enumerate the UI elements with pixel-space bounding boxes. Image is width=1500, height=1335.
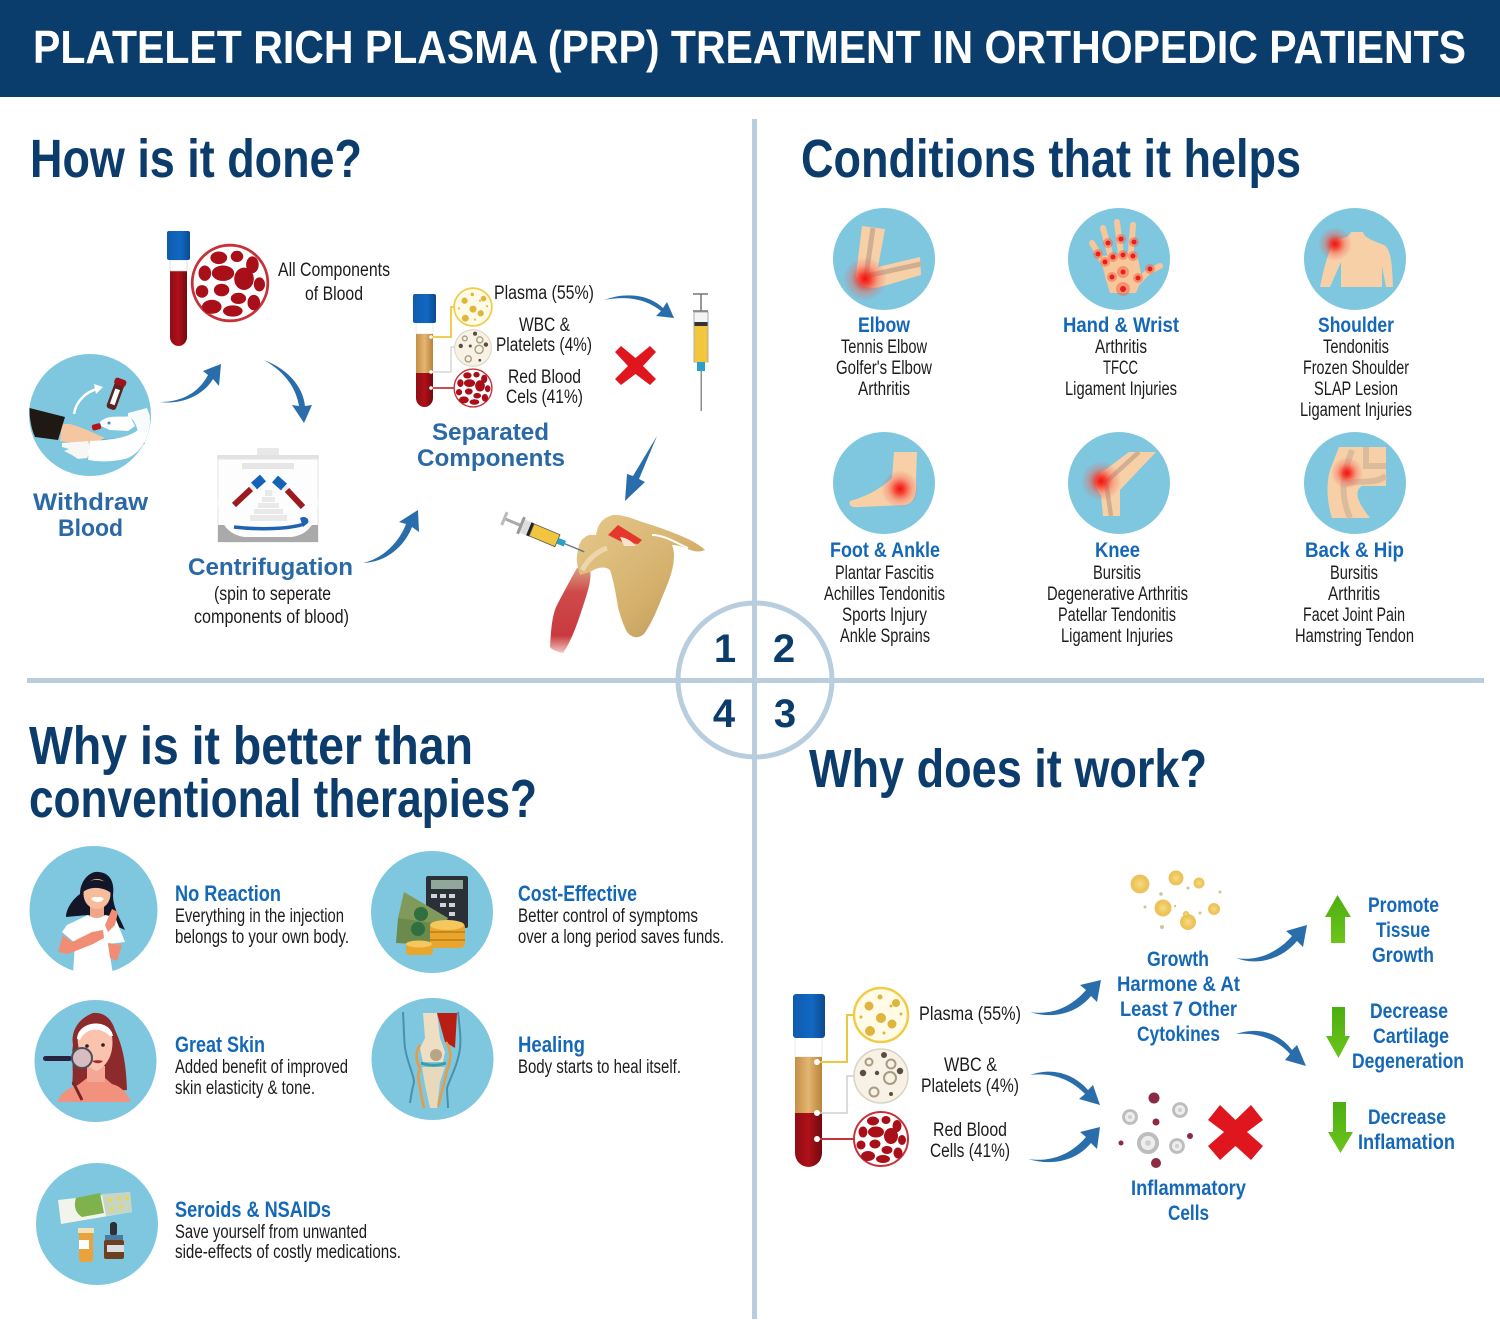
condition: hand and wrist: Hand & Wrist [1063, 314, 1179, 337]
illustration: shoulder injection [500, 510, 705, 653]
condition: shoulder: Tendonitis [1323, 337, 1389, 358]
outcome: decrease cartilage degeneration: Degeneration [1352, 1050, 1464, 1073]
condition: knee [1047, 432, 1188, 647]
label: centrifugation: Centrifugation [188, 554, 353, 581]
condition: foot and ankle: Sports Injury [842, 605, 927, 626]
labels: blood fractions: Cells (41%) [930, 1141, 1010, 1162]
benefit: healing: Healing [518, 1032, 585, 1057]
icon: growth factors [1130, 870, 1222, 930]
condition: back and hip: Hamstring Tendon [1295, 626, 1414, 647]
heading: how is it done: How is it done? [30, 129, 362, 189]
quadrant dividers and number circle: 4 [713, 692, 736, 736]
labels: blood fractions [494, 283, 594, 408]
icon: green down arrow [1326, 1007, 1350, 1058]
icon: blood tube [167, 231, 190, 346]
benefit: steroids and NSAIDs: Seroids & NSAIDs [175, 1197, 331, 1222]
condition: hand and wrist: Ligament Injuries [1065, 379, 1177, 400]
condition: elbow: Golfer's Elbow [836, 358, 932, 379]
icon: syringe [693, 294, 708, 411]
benefit: cost effective [371, 851, 724, 973]
label: separated components: Separated [432, 419, 549, 446]
condition: hand and wrist [1063, 208, 1179, 400]
outcome: decrease cartilage degeneration: Decrease [1370, 1000, 1448, 1023]
labels: blood fractions: Platelets (4%) [921, 1076, 1019, 1097]
benefit: healing: Body starts to heal itself. [518, 1057, 681, 1078]
arrow: withdraw to tube [160, 364, 221, 402]
heading: why does it work: Why does it work? [809, 739, 1207, 799]
outcome: decrease cartilage degeneration: Cartilage [1373, 1025, 1449, 1048]
labels: blood fractions: WBC & [519, 315, 570, 336]
condition: back and hip: Facet Joint Pain [1303, 605, 1405, 626]
benefit: great skin: Great Skin [175, 1032, 265, 1057]
icon: red cross [1208, 1105, 1263, 1160]
arrow: syringe to shoulder [625, 436, 657, 501]
benefit: no reaction [30, 846, 349, 974]
arrow: centrifuge to components [363, 510, 419, 563]
arrow: WBC to inflammatory cells [1030, 1072, 1100, 1105]
condition: back and hip: Bursitis [1330, 563, 1378, 584]
condition: knee: Ligament Injuries [1061, 626, 1173, 647]
condition: foot and ankle: Plantar Fascitis [835, 563, 934, 584]
quadrant dividers and number circle: 1 [714, 627, 736, 671]
icon: centrifuge [217, 448, 319, 542]
outcome: promote tissue growth: Promote [1368, 894, 1439, 917]
labels: blood fractions [919, 1004, 1021, 1162]
benefit: cost effective: Cost-Effective [518, 881, 637, 906]
labels: blood fractions: Cels (41%) [506, 387, 583, 408]
panel: why better than conventional therapies [30, 846, 724, 1285]
condition: shoulder [1300, 208, 1412, 421]
label: separated components [417, 419, 565, 472]
icon: withdraw blood [29, 354, 151, 476]
outcome: decrease inflammation: Inflamation [1358, 1131, 1455, 1154]
heading: why better: Why is it better than [29, 716, 473, 776]
labels: blood fractions: Plasma (55%) [919, 1004, 1021, 1025]
label: inflammatory cells [1131, 1177, 1246, 1225]
label: withdraw blood: Blood [58, 515, 123, 542]
arrow: tube to centrifuge [264, 360, 312, 423]
label: growth factors: Cytokines [1137, 1023, 1220, 1046]
condition: knee: Bursitis [1093, 563, 1141, 584]
condition: shoulder: Frozen Shoulder [1303, 358, 1410, 379]
condition: shoulder: Shoulder [1318, 314, 1394, 337]
label: growth factors: Least 7 Other [1120, 998, 1237, 1021]
benefit: steroids and NSAIDs: side-effects of costly medications. [175, 1242, 401, 1263]
panel: how is it done [29, 231, 708, 653]
label: centrifugation: components of blood) [194, 607, 349, 628]
panel: conditions that it helps [824, 208, 1414, 647]
label: withdraw blood [33, 489, 148, 542]
benefit: no reaction: No Reaction [175, 881, 281, 906]
label: separated components: Components [417, 445, 565, 472]
labels: blood fractions: Plasma (55%) [494, 283, 594, 304]
labels: blood fractions: Red Blood [933, 1120, 1007, 1141]
label: all components [278, 260, 390, 305]
label: withdraw blood: Withdraw [33, 489, 148, 516]
heading: conditions: Conditions that it helps [801, 129, 1301, 189]
outcome: decrease inflammation: Decrease [1368, 1106, 1446, 1129]
icon: green down arrow [1328, 1102, 1353, 1153]
outcome: promote tissue growth: Growth [1372, 944, 1434, 967]
label: growth factors: Harmone & At [1117, 973, 1240, 996]
label: centrifugation: (spin to seperate [214, 584, 331, 605]
condition: foot and ankle: Ankle Sprains [840, 626, 930, 647]
labels: blood fractions: WBC & [944, 1055, 997, 1076]
condition: knee: Patellar Tendonitis [1058, 605, 1176, 626]
benefit: no reaction: Everything in the injection [175, 906, 344, 927]
condition: hand and wrist: Arthritis [1095, 337, 1147, 358]
panel: why does it work [793, 870, 1464, 1225]
label: all components: All Components [278, 260, 390, 281]
condition: elbow: Tennis Elbow [841, 337, 927, 358]
condition: foot and ankle: Foot & Ankle [830, 539, 940, 562]
condition: shoulder: SLAP Lesion [1314, 379, 1398, 400]
quadrant dividers and number circle: 2 [773, 627, 795, 671]
heading: why better [29, 716, 537, 829]
benefit: steroids and NSAIDs: Save yourself from unwanted [175, 1222, 367, 1243]
quadrant dividers and number circle: 3 [774, 692, 796, 736]
arrow: plasma to syringe [604, 295, 674, 318]
condition: elbow: Arthritis [858, 379, 910, 400]
label: all components: of Blood [305, 284, 363, 305]
condition: back and hip [1295, 432, 1414, 647]
arrow: growth factors to cartilage [1236, 1031, 1306, 1066]
condition: knee: Knee [1095, 539, 1140, 562]
labels: blood fractions: Platelets (4%) [496, 335, 592, 356]
header banner [0, 0, 1500, 97]
condition: hand and wrist: TFCC [1103, 358, 1138, 379]
labels: blood fractions: Red Blood [508, 367, 581, 388]
condition: knee: Degenerative Arthritis [1047, 584, 1188, 605]
benefit: steroids and NSAIDs [36, 1163, 401, 1285]
arrow: plasma to growth factors [1030, 980, 1101, 1015]
label: growth factors: Growth [1147, 948, 1209, 971]
icon: blood cells [192, 245, 268, 321]
benefit: healing [372, 998, 681, 1120]
icon: inflammatory cells [1118, 1092, 1193, 1168]
condition: back and hip: Arthritis [1328, 584, 1380, 605]
label: inflammatory cells: Inflammatory [1131, 1177, 1246, 1200]
condition: foot and ankle [824, 432, 945, 647]
condition: foot and ankle: Achilles Tendonitis [824, 584, 945, 605]
icon: green up arrow [1325, 895, 1351, 943]
outcome: decrease inflammation [1358, 1106, 1455, 1154]
label: centrifugation [188, 554, 353, 628]
benefit: great skin [34, 1000, 348, 1122]
condition: elbow: Elbow [858, 314, 911, 337]
outcome: promote tissue growth: Tissue [1376, 919, 1430, 942]
benefit: cost effective: over a long period saves funds. [518, 927, 724, 948]
benefit: great skin: skin elasticity & tone. [175, 1078, 315, 1099]
icon: red cross [615, 346, 656, 385]
condition: shoulder: Ligament Injuries [1300, 400, 1412, 421]
benefit: great skin: Added benefit of improved [175, 1057, 348, 1078]
outcome: promote tissue growth [1368, 894, 1439, 967]
condition: elbow [833, 208, 935, 400]
benefit: no reaction: belongs to your own body. [175, 927, 349, 948]
heading: why better: conventional therapies? [29, 769, 537, 829]
icon: separated tube [793, 988, 908, 1167]
icon: separated tube [413, 288, 492, 407]
outcome: decrease cartilage degeneration [1352, 1000, 1464, 1073]
label: growth factors [1117, 948, 1240, 1046]
benefit: cost effective: Better control of symptoms [518, 906, 698, 927]
label: inflammatory cells: Cells [1168, 1202, 1209, 1225]
condition: back and hip: Back & Hip [1305, 539, 1404, 562]
arrow: RBC to inflammatory cells [1028, 1127, 1100, 1162]
arrow: growth factors to tissue growth [1236, 925, 1307, 961]
